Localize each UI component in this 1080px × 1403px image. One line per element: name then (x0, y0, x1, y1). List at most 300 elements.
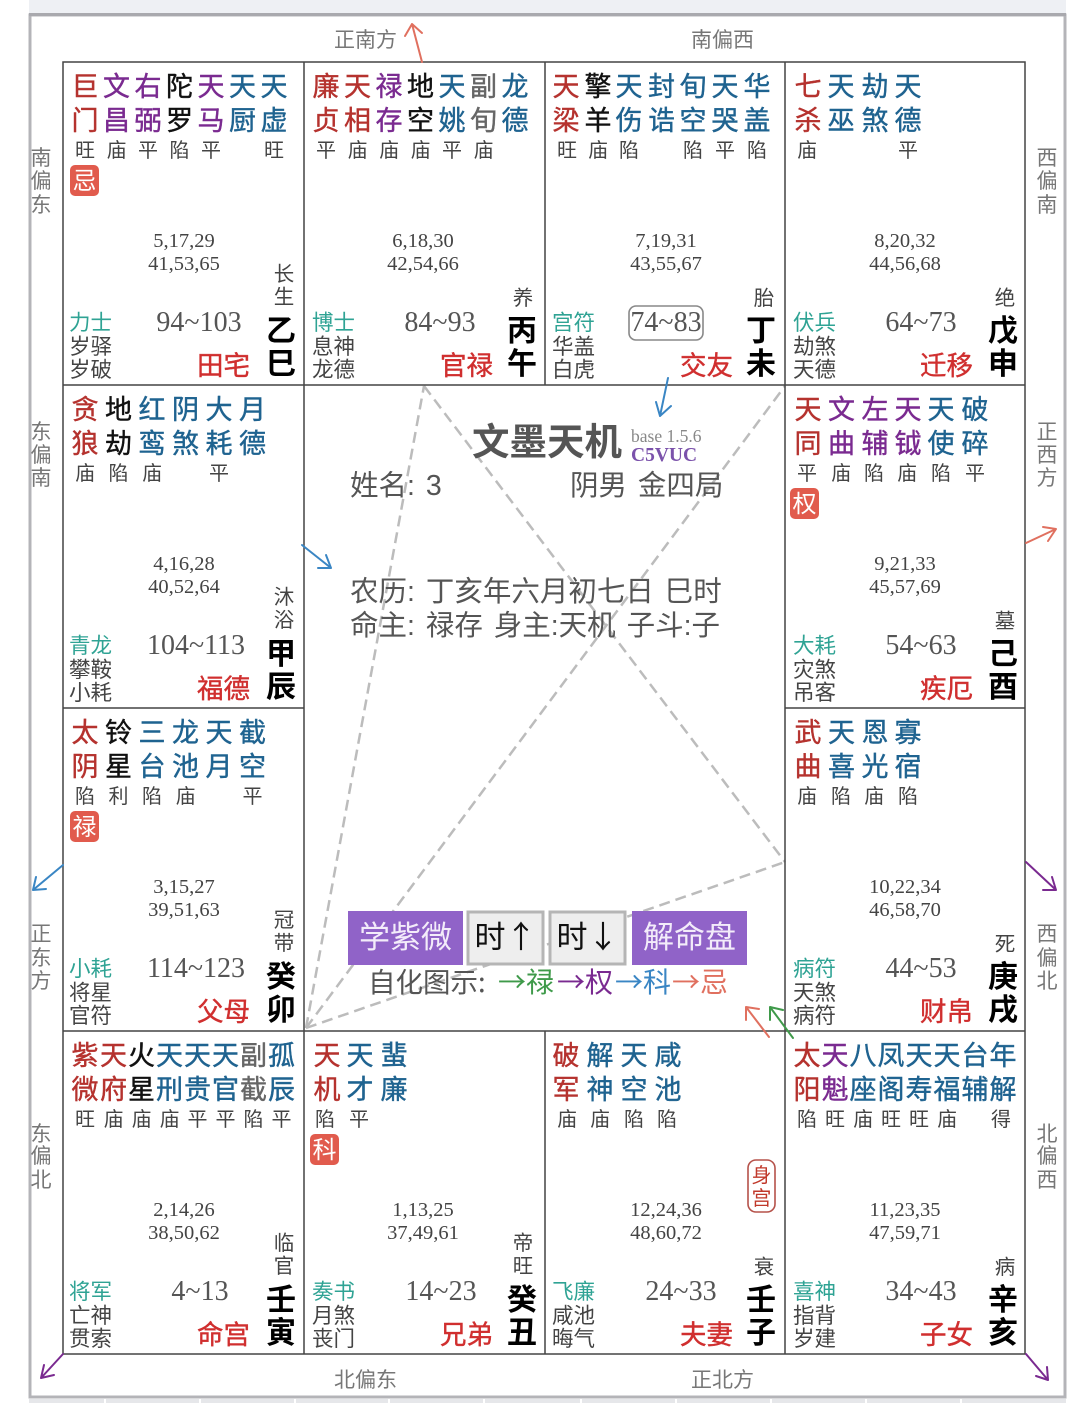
central dashed triangle lines (306, 386, 785, 1028)
panel: palace 子 夫妻: 壬 (746, 1284, 776, 1317)
direction labels: 偏 (30, 1145, 52, 1168)
panel: palace 亥 子女: 病 (995, 1256, 1015, 1279)
panel: palace 辰 福德: 平 (209, 463, 229, 485)
panel: palace 午 官禄: 贞 (312, 106, 340, 136)
panel: palace 未 交友: 伤 (616, 106, 642, 136)
panel: palace 辰 福德: 104~113 (147, 630, 245, 661)
panel: palace 午 官禄: 博士 (312, 311, 355, 335)
direction labels: 偏 (30, 444, 52, 467)
panel: palace 未 交友: 白虎 (552, 358, 595, 382)
panel: palace 辰 福德: 浴 (274, 609, 294, 632)
panel: palace 子 夫妻: 神 (586, 1075, 614, 1105)
text block: name: 姓名: 3 (350, 470, 442, 502)
panel: palace 巳 田宅: 文 (103, 72, 130, 102)
panel: palace 亥 子女: 庙 (853, 1108, 873, 1131)
direction labels: 西 (1036, 147, 1058, 170)
arrow: red north (405, 24, 422, 62)
panel: palace 寅 命宫: 亡神 (69, 1304, 112, 1328)
panel: palace 亥 子女: 台 (962, 1041, 988, 1071)
legend: self-transformation key (368, 960, 728, 1001)
panel: palace 酉 疾厄: 陷 (931, 462, 951, 485)
panel: palace 丑 兄弟: 帝 (513, 1232, 533, 1255)
arrow: green into centre from 亥 (770, 1007, 793, 1038)
panel: palace 酉 疾厄: 庙 (831, 462, 851, 485)
panel: palace 丑 兄弟: 蜚 (380, 1041, 408, 1071)
direction labels: 南 (1036, 194, 1058, 217)
panel: palace 戌 财帛: 10,22,34 (869, 876, 941, 898)
panel: palace 亥 子女: 天 (934, 1041, 960, 1071)
panel: palace 寅 命宫: 贵 (184, 1075, 211, 1105)
panel: palace 巳 田宅: 天 (198, 72, 224, 102)
panel: palace 卯 父母: 太 (72, 718, 98, 748)
panel: palace 戌 财帛: 财帛 (920, 997, 973, 1027)
panel: palace 子 夫妻: 咸池 (552, 1304, 595, 1328)
panel: palace 午 官禄: 德 (502, 106, 528, 136)
panel: palace 未 交友: 旬 (680, 72, 706, 102)
panel: palace 酉 疾厄: 45,57,69 (869, 576, 941, 598)
panel: palace 亥 子女: 旺 (881, 1109, 901, 1131)
panel: palace 辰 福德: 鸾 (138, 429, 166, 459)
direction labels: 西 (1036, 1169, 1058, 1192)
panel: palace 午 官禄: 姚 (438, 106, 466, 136)
panel: palace 酉 疾厄: 左 (862, 395, 888, 425)
panel: palace 酉 疾厄: 墓 (995, 610, 1015, 633)
panel: palace 寅 命宫: 贯索 (69, 1327, 112, 1351)
panel: palace 戌 财帛: 44~53 (885, 953, 957, 984)
panel: palace 巳 田宅: 岁破 (69, 358, 112, 382)
panel: palace 申 迁移: 平 (898, 140, 918, 162)
legend: self-transformation key: →科 (615, 961, 671, 1001)
panel: palace 亥 子女: 天 (906, 1041, 932, 1071)
panel: palace 申 迁移: 伏兵 (793, 311, 836, 335)
direction labels: 南偏西 (691, 29, 754, 52)
panel: palace 申 迁移: 64~73 (885, 307, 957, 338)
panel: palace 巳 田宅: 虚 (260, 106, 288, 136)
panel: palace 卯 父母: 平 (242, 786, 262, 808)
text block: gender and bureau: 阴男 金四局 (570, 470, 723, 502)
panel: palace 寅 命宫: 平 (272, 1109, 292, 1131)
panel: palace 酉 疾厄: 文 (828, 395, 855, 425)
panel: palace 寅 命宫: 微 (72, 1075, 98, 1105)
direction labels: 方 (1036, 467, 1058, 490)
panel: palace 申 迁移: 劫 (862, 72, 888, 102)
panel: palace 申 迁移: 迁移 (920, 351, 973, 381)
panel: palace 寅 命宫: 陷 (244, 1108, 264, 1131)
panel: palace 亥 子女: 寿 (906, 1075, 932, 1105)
direction labels: 偏 (1036, 947, 1058, 970)
panel: palace 午 官禄: 6,18,30 (392, 230, 454, 252)
panel: palace 戌 财帛: 陷 (831, 785, 851, 808)
panel: palace 巳 田宅: 昌 (103, 106, 130, 136)
panel: palace 申 迁移 (793, 72, 1018, 382)
panel: palace 卯 父母: 星 (105, 752, 132, 782)
panel: palace 酉 疾厄: 平 (797, 463, 817, 485)
panel: palace 丑 兄弟: 机 (314, 1075, 340, 1105)
panel: palace 巳 田宅: 旺 (75, 140, 95, 162)
panel: palace 巳 田宅: 旺 (264, 140, 284, 162)
panel: palace 亥 子女: 阁 (878, 1075, 904, 1105)
body palace stamp (748, 1160, 775, 1212)
panel: palace 亥 子女: 亥 (988, 1317, 1018, 1350)
direction labels: 北 (1036, 1123, 1058, 1146)
panel: palace 卯 父母: 父母 (197, 997, 250, 1027)
panel: palace 未 交友: 庙 (588, 139, 608, 162)
panel: palace 申 迁移: 煞 (862, 106, 888, 136)
panel: palace 酉 疾厄: 同 (794, 429, 822, 459)
panel: palace 寅 命宫 (69, 1041, 296, 1351)
panel: palace 子 夫妻: 庙 (557, 1108, 577, 1131)
panel: palace 寅 命宫: 天 (156, 1041, 183, 1071)
panel: palace 子 夫妻: 48,60,72 (630, 1222, 702, 1244)
panel: palace 戌 财帛: 恩 (862, 718, 888, 748)
panel: palace 寅 命宫: 庙 (104, 1108, 124, 1131)
legend: self-transformation key: →权 (557, 961, 613, 1001)
panel: palace 未 交友: 羊 (584, 106, 612, 136)
button: 解命盘: 解命盘 (643, 912, 736, 957)
panel: palace 戌 财帛: 46,58,70 (869, 899, 941, 921)
panel: palace 亥 子女 (793, 1041, 1018, 1351)
panel: palace 未 交友: 华 (744, 72, 770, 102)
panel: palace 寅 命宫: 官 (274, 1255, 294, 1278)
panel: palace 巳 田宅: 忌 (72, 168, 96, 195)
panel: palace 亥 子女: 旺 (909, 1109, 929, 1131)
panel: palace 申 迁移: 申 (988, 348, 1018, 381)
panel: palace 卯 父母: 陷 (75, 785, 95, 808)
panel: palace 亥 子女: 辅 (962, 1075, 988, 1105)
panel: palace 未 交友: 74~83 (630, 307, 702, 338)
version label: base 1.5.6 (631, 426, 702, 446)
panel: palace 巳 田宅: 长 (274, 263, 294, 286)
text block: ming and shen lords: 命主: 禄存 身主:天机 子斗:子 (350, 610, 720, 642)
panel: palace 亥 子女: 凤 (878, 1041, 904, 1071)
panel: palace 辰 福德: 狼 (72, 429, 98, 459)
panel: palace 寅 命宫: 38,50,62 (148, 1222, 220, 1244)
panel: palace 寅 命宫: 平 (216, 1109, 236, 1131)
panel: palace 亥 子女: 喜神 (793, 1280, 836, 1304)
panel: palace 辰 福德: 地 (105, 395, 132, 425)
button: 学紫微 (348, 911, 463, 965)
panel: palace 丑 兄弟: 癸 (507, 1284, 537, 1317)
panel: palace 亥 子女: 11,23,35 (870, 1199, 940, 1221)
panel: palace 未 交友: 天 (616, 72, 642, 102)
arrow: blue into centre from left (302, 545, 331, 568)
panel: palace 辰 福德: 劫 (105, 429, 132, 459)
panel: palace 寅 命宫: 紫 (72, 1041, 98, 1071)
arrow: red into centre from 亥 (746, 1007, 769, 1037)
panel: palace 亥 子女: 47,59,71 (869, 1222, 941, 1244)
panel: palace 巳 田宅: 平 (138, 140, 158, 162)
panel: palace 丑 兄弟: 旺 (513, 1255, 533, 1278)
panel: palace 戌 财帛: 喜 (828, 752, 855, 782)
panel: palace 戌 财帛 (793, 718, 1018, 1028)
panel: palace 戌 财帛: 曲 (794, 752, 822, 782)
panel: palace 戌 财帛: 寡 (894, 718, 922, 748)
panel: palace 未 交友: 天 (712, 72, 738, 102)
panel: palace 卯 父母: 将星 (69, 981, 112, 1005)
panel: palace 子 夫妻: 24~33 (645, 1276, 717, 1307)
panel: palace 酉 疾厄: 天 (794, 395, 822, 425)
panel: palace 丑 兄弟: 丧门 (312, 1327, 355, 1351)
panel: palace 未 交友: 擎 (584, 72, 612, 102)
panel: palace 申 迁移: 天 (894, 72, 922, 102)
panel: palace 卯 父母: 冠 (274, 909, 294, 932)
panel: palace 寅 命宫: 壬 (266, 1284, 296, 1317)
panel: palace 巳 田宅: 天 (260, 72, 288, 102)
panel: palace 寅 命宫: 庙 (160, 1108, 180, 1131)
panel: palace 酉 疾厄: 大耗 (793, 634, 836, 658)
panel: palace 酉 疾厄: 碎 (962, 429, 988, 459)
panel: palace 辰 福德: 40,52,64 (148, 576, 220, 598)
arrow: blue to centre from 未 (656, 378, 671, 416)
direction labels: 偏 (30, 170, 52, 193)
panel: palace 辰 福德: 庙 (142, 462, 162, 485)
panel: palace 申 迁移: 德 (894, 106, 922, 136)
panel: palace 戌 财帛: 庙 (797, 785, 817, 808)
panel: palace 寅 命宫: 官 (212, 1075, 239, 1105)
panel: palace 午 官禄: 龙德 (312, 358, 355, 382)
panel: palace 申 迁移: 七 (794, 72, 822, 102)
panel: palace 午 官禄: 养 (513, 287, 533, 310)
panel: palace 卯 父母: 官符 (69, 1004, 112, 1028)
panel: palace 巳 田宅: 平 (201, 140, 221, 162)
panel: palace 寅 命宫: 天 (212, 1041, 239, 1071)
panel: palace 辰 福德: 陷 (108, 462, 128, 485)
panel: palace 卯 父母: 铃 (105, 718, 132, 748)
panel: palace 巳 田宅: 41,53,65 (148, 253, 220, 275)
panel: palace 未 交友: 胎 (754, 287, 774, 310)
panel: palace 酉 疾厄: 破 (962, 395, 988, 425)
panel: palace 丑 兄弟: 平 (349, 1109, 369, 1131)
panel: palace 寅 命宫: 平 (188, 1109, 208, 1131)
panel: palace 午 官禄: 副 (470, 72, 497, 102)
panel: palace 午 官禄: 存 (376, 106, 402, 136)
panel: palace 酉 疾厄: 灾煞 (793, 658, 836, 682)
panel: palace 未 交友: 宫符 (552, 311, 595, 335)
panel: palace 未 交友: 陷 (747, 139, 767, 162)
panel: palace 亥 子女: 辛 (988, 1284, 1018, 1317)
panel: palace 午 官禄: 平 (442, 140, 462, 162)
panel: palace 未 交友: 哭 (712, 106, 738, 136)
panel: palace 巳 田宅: 陀 (166, 72, 193, 102)
direction labels: 北偏东 (334, 1369, 397, 1392)
direction labels: 东 (30, 194, 52, 217)
panel: palace 丑 兄弟: 月煞 (312, 1304, 355, 1328)
panel: palace 酉 疾厄 (790, 395, 1018, 705)
panel: palace 酉 疾厄: 陷 (864, 462, 884, 485)
panel: palace 巳 田宅: 天 (229, 72, 256, 102)
panel: palace 巳 田宅: 陷 (170, 139, 190, 162)
panel: palace 巳 田宅: 94~103 (156, 307, 242, 338)
button: 解命盘 (632, 911, 747, 965)
chart code: C5VUC (631, 445, 697, 466)
panel: palace 戌 财帛: 陷 (898, 785, 918, 808)
panel: palace 卯 父母 (69, 718, 296, 1028)
panel: palace 申 迁移: 巫 (828, 106, 854, 136)
direction labels: 东 (30, 1123, 52, 1146)
arrow: purple to west-north (1026, 862, 1056, 890)
panel: palace 巳 田宅: 力士 (69, 311, 112, 335)
panel: palace 巳 田宅: 乙 (266, 315, 296, 348)
panel: palace 未 交友 (552, 72, 776, 382)
panel: palace 午 官禄: 相 (344, 106, 371, 136)
legend: self-transformation key: →忌 (672, 961, 728, 1001)
legend: self-transformation key: →禄 (498, 961, 554, 1001)
panel: palace 酉 疾厄: 钺 (894, 429, 922, 459)
panel: palace 戌 财帛: 光 (862, 752, 888, 782)
panel: palace 巳 田宅 (69, 72, 296, 382)
panel: palace 戌 财帛: 天 (828, 718, 855, 748)
panel: palace 午 官禄: 天 (438, 72, 466, 102)
panel: palace 辰 福德: 小耗 (69, 681, 112, 705)
panel: palace 辰 福德: 攀鞍 (69, 658, 112, 682)
panel: palace 申 迁移: 杀 (794, 106, 822, 136)
panel: palace 子 夫妻: 12,24,36 (630, 1199, 702, 1221)
panel: palace 寅 命宫: 2,14,26 (153, 1199, 215, 1221)
panel: palace 巳 田宅: 巨 (72, 72, 98, 102)
panel: palace 申 迁移: 天 (828, 72, 854, 102)
panel: palace 辰 福德: 贪 (72, 395, 98, 425)
panel: palace 寅 命宫: 命宫 (197, 1320, 250, 1350)
panel: palace 辰 福德 (69, 395, 296, 705)
panel: palace 亥 子女: 座 (850, 1075, 876, 1105)
panel: palace 寅 命宫: 临 (274, 1232, 294, 1255)
panel: palace 辰 福德: 煞 (172, 429, 199, 459)
panel: palace 亥 子女: 八 (850, 1041, 876, 1071)
panel: palace 戌 财帛: 宿 (894, 752, 922, 782)
direction labels: 北 (1036, 970, 1058, 993)
panel: palace 申 迁移: 劫煞 (793, 335, 836, 359)
panel: palace 亥 子女: 34~43 (885, 1276, 957, 1307)
panel: palace 亥 子女: 陷 (797, 1108, 817, 1131)
panel: palace 午 官禄: 84~93 (404, 307, 476, 338)
panel: palace 戌 财帛: 庙 (864, 785, 884, 808)
panel: palace 未 交友: 盖 (744, 106, 770, 136)
panel: palace 丑 兄弟: 才 (346, 1075, 374, 1105)
panel: palace 午 官禄: 廉 (312, 72, 340, 102)
panel: palace 卯 父母: 癸 (266, 961, 296, 994)
panel: palace 酉 疾厄: 54~63 (885, 630, 957, 661)
panel: palace 亥 子女: 庙 (937, 1108, 957, 1131)
panel: palace 卯 父母: 利 (108, 785, 128, 808)
panel: palace 丑 兄弟 (310, 1041, 537, 1351)
panel: palace 未 交友: 天 (552, 72, 580, 102)
panel: palace 巳 田宅: 巳 (266, 348, 296, 381)
panel: palace 巳 田宅: 5,17,29 (153, 230, 215, 252)
panel: palace 寅 命宫: 火 (128, 1041, 155, 1071)
panel: palace 午 官禄: 天 (344, 72, 371, 102)
panel: palace 戌 财帛: 戌 (988, 994, 1018, 1027)
panel: palace 子 夫妻 (552, 1041, 776, 1351)
panel: palace 酉 疾厄: 吊客 (793, 681, 836, 705)
panel: palace 辰 福德: 青龙 (69, 634, 112, 658)
panel: palace 子 夫妻: 晦气 (552, 1327, 595, 1351)
button: hour up: 时↑ (474, 912, 536, 957)
panel: palace 午 官禄: 禄 (376, 72, 402, 102)
panel: palace 卯 父母: 小耗 (69, 957, 112, 981)
panel: palace 巳 田宅: 庙 (106, 139, 126, 162)
panel: palace 戌 财帛: 病符 (793, 957, 836, 981)
panel: palace 亥 子女: 得 (991, 1108, 1011, 1131)
panel: palace 丑 兄弟: 奏书 (312, 1280, 355, 1304)
direction labels: 南 (30, 467, 52, 490)
panel: palace 酉 疾厄: 曲 (828, 429, 855, 459)
button: 学紫微: 学紫微 (359, 912, 452, 957)
panel: palace 午 官禄: 庙 (348, 139, 368, 162)
panel: palace 寅 命宫: 截 (240, 1075, 267, 1105)
panel: palace 卯 父母: 截 (239, 718, 266, 748)
panel: palace 卯 父母: 卯 (266, 994, 296, 1027)
panel: palace 未 交友: 梁 (552, 106, 580, 136)
panel: palace 亥 子女: 岁建 (793, 1327, 836, 1351)
direction labels: 偏 (1036, 1145, 1058, 1168)
panel: palace 丑 兄弟: 天 (346, 1041, 374, 1071)
panel: palace 申 迁移: 戊 (988, 315, 1018, 348)
panel: palace 丑 兄弟: 天 (314, 1041, 340, 1071)
panel: palace 卯 父母: 阴 (72, 752, 98, 782)
panel: palace 辰 福德: 大 (206, 395, 232, 425)
direction labels: 南 (30, 147, 52, 170)
body palace stamp: 宫 (752, 1187, 772, 1210)
panel: palace 午 官禄: 丙 (507, 315, 537, 348)
panel: palace 子 夫妻: 庙 (590, 1108, 610, 1131)
panel: palace 未 交友: 丁 (746, 315, 776, 348)
panel: palace 寅 命宫: 副 (240, 1041, 267, 1071)
direction labels: 正南方 (334, 29, 397, 52)
panel: palace 未 交友: 7,19,31 (635, 230, 697, 252)
panel: palace 亥 子女: 阳 (794, 1075, 820, 1105)
panel: palace 酉 疾厄: 天 (928, 395, 954, 425)
panel: palace 寅 命宫: 将军 (69, 1280, 112, 1304)
panel: palace 申 迁移: 44,56,68 (869, 253, 941, 275)
panel: palace 辰 福德: 辰 (266, 671, 296, 704)
panel: palace 子 夫妻: 军 (552, 1075, 580, 1105)
decade range highlight box (629, 306, 703, 340)
panel: palace 寅 命宫: 天 (100, 1041, 127, 1071)
panel: palace 寅 命宫: 辰 (268, 1075, 295, 1105)
panel: palace 戌 财帛: 天煞 (793, 981, 836, 1005)
panel: palace 未 交友: 旺 (557, 140, 577, 162)
panel: palace 卯 父母: 114~123 (147, 953, 245, 984)
panel: palace 申 迁移: 8,20,32 (874, 230, 936, 252)
panel: palace 子 夫妻: 飞廉 (552, 1280, 595, 1304)
arrow: purple to south-east corner (1026, 1354, 1048, 1380)
panel: palace 卯 父母: 龙 (172, 718, 199, 748)
panel: palace 未 交友: 未 (746, 348, 776, 381)
panel: palace 子 夫妻: 陷 (657, 1108, 677, 1131)
panel: palace 戌 财帛: 死 (995, 933, 1015, 956)
panel: palace 丑 兄弟: 科 (312, 1137, 336, 1164)
panel: palace 未 交友: 平 (715, 140, 735, 162)
panel: palace 辰 福德: 福德 (197, 674, 250, 704)
panel: palace 午 官禄: 地 (407, 72, 434, 102)
panel: palace 巳 田宅: 田宅 (197, 351, 250, 381)
panel: palace 寅 命宫: 星 (128, 1075, 155, 1105)
panel: palace 申 迁移: 天德 (793, 358, 836, 382)
panel: palace 辰 福德: 月 (239, 395, 266, 425)
legend: self-transformation key: 自化图示: (368, 960, 486, 1000)
panel: palace 寅 命宫: 寅 (266, 1317, 296, 1350)
panel: palace 丑 兄弟: 丑 (507, 1317, 537, 1350)
panel: palace 酉 疾厄: 使 (928, 429, 954, 459)
panel: palace 巳 田宅: 岁驿 (69, 335, 112, 359)
panel: palace 寅 命宫: 刑 (156, 1075, 183, 1105)
panel: palace 酉 疾厄: 己 (988, 638, 1018, 671)
panel: palace 辰 福德: 耗 (206, 429, 232, 459)
panel: palace 辰 福德: 德 (239, 429, 266, 459)
direction labels: 正 (30, 923, 52, 946)
arrow: purple to south-west corner (41, 1354, 63, 1378)
panel: palace 午 官禄: 庙 (474, 139, 494, 162)
